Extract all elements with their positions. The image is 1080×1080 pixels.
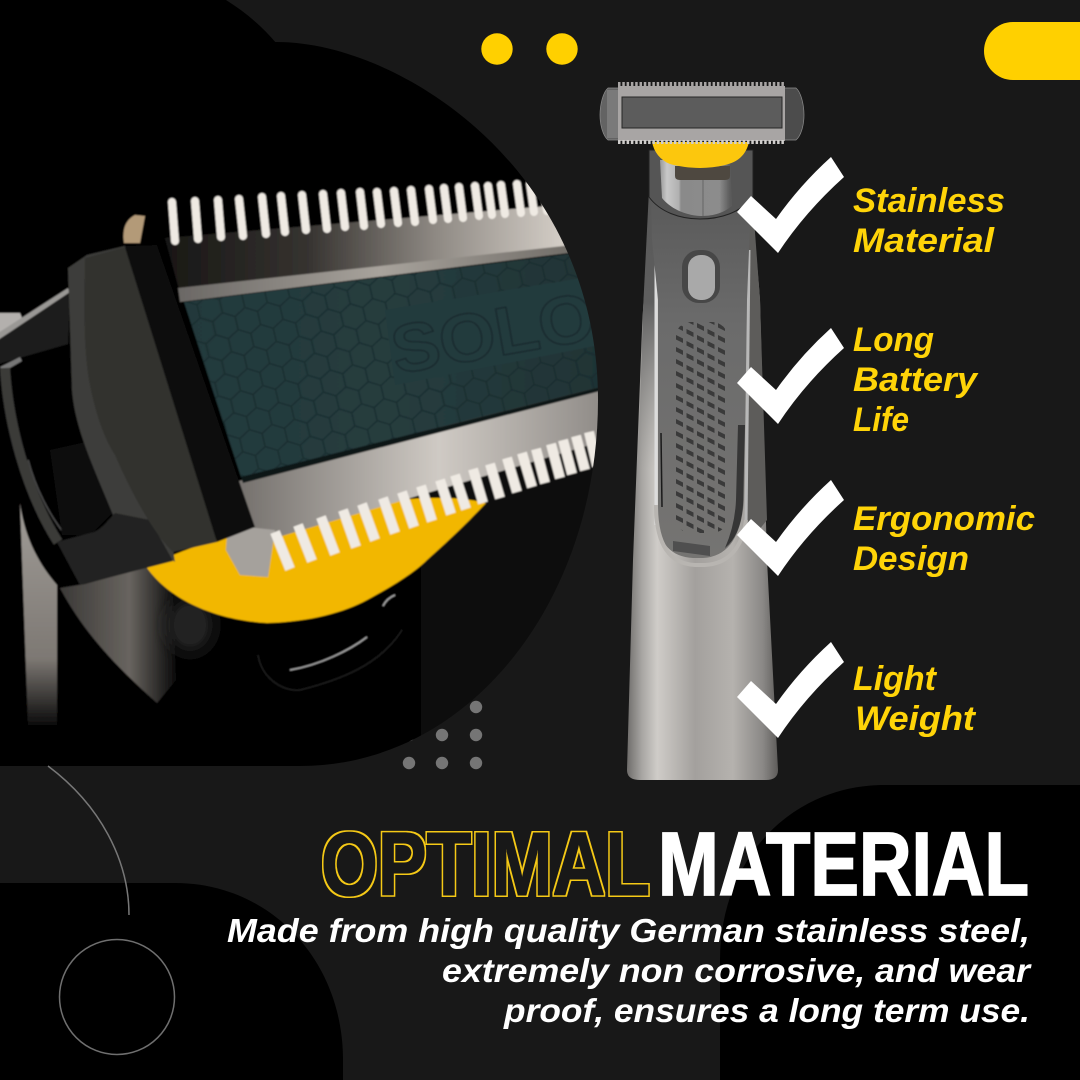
right side strip (747, 205, 767, 545)
feature: long battery life (853, 321, 979, 439)
bracket dark arm (0, 292, 70, 365)
description: extremely non corrosive, and wear (442, 952, 1032, 989)
end cap black band (125, 245, 255, 542)
yellow guard (147, 498, 486, 623)
decorative circle (60, 940, 174, 1054)
yellow dot right (546, 33, 578, 65)
lens shadow (50, 440, 115, 535)
description (227, 912, 1032, 1029)
lower blade notch (226, 525, 275, 577)
handle panel (651, 200, 751, 558)
panel shadow right (725, 425, 745, 548)
title: OPTIMAL (321, 815, 650, 915)
power button (688, 255, 715, 300)
photo: blade close-up (0, 30, 611, 780)
shape: bottom-left black block (0, 883, 343, 1080)
neck (649, 150, 753, 219)
check mark 3 (737, 480, 844, 576)
panel lower slot (673, 541, 710, 556)
grip texture (675, 322, 728, 533)
decorative arc line (48, 766, 129, 915)
handle dark highlight (166, 597, 214, 653)
upper blade body (165, 205, 582, 293)
copper tab (123, 215, 145, 243)
check mark 1 (737, 157, 844, 253)
bracket white patch (0, 312, 23, 333)
feature: long battery life: Long (853, 321, 934, 359)
yellow dot left (481, 33, 513, 65)
product: trimmer (600, 84, 804, 780)
description: Made from high quality German stainless steel, (227, 912, 1030, 949)
feature: ergonomic design: Design (853, 540, 969, 578)
feature: long battery life: Battery (853, 361, 979, 399)
description: proof, ensures a long term use. (503, 992, 1030, 1029)
green panel with hexagon texture (184, 250, 600, 483)
handle switch outlines (258, 630, 402, 690)
dark backdrop right (421, 432, 593, 735)
bracket tab (0, 357, 22, 372)
power button rim (682, 250, 720, 303)
title (321, 815, 1029, 915)
head top teeth (618, 82, 785, 87)
check mark 4 (737, 642, 844, 738)
feature: ergonomic design (853, 500, 1035, 578)
feature: stainless material: Stainless (853, 182, 1005, 220)
upper blade teeth (172, 183, 547, 241)
head left cap (600, 88, 622, 140)
head bottom teeth (618, 140, 785, 144)
shape: bottom-right black block (720, 785, 1080, 1080)
lower blade teeth (275, 432, 597, 569)
bracket hook (57, 513, 173, 585)
trimmer handle silhouette (627, 190, 778, 780)
head right cap (782, 88, 804, 140)
collar slot (675, 166, 730, 180)
feature: light weight: Weight (855, 700, 977, 738)
bracket inner highlight (28, 460, 63, 532)
head center panel (622, 97, 782, 128)
feature: stainless material (853, 182, 1005, 260)
collar seam (702, 180, 704, 216)
decorative dot grid (403, 701, 482, 769)
bracket outer curved arm (5, 368, 58, 542)
handle silver column (20, 503, 57, 725)
handle swoosh surface (60, 560, 176, 703)
yellow guard (652, 142, 749, 168)
panel shadow left (661, 433, 662, 507)
embossed SOLO lettering: SOLO (385, 278, 600, 389)
feature: long battery life: Life (853, 401, 909, 439)
head left cap highlight (607, 90, 622, 138)
feature: ergonomic design: Ergonomic (853, 500, 1035, 538)
end cap panel (84, 247, 217, 552)
cap outer rim (68, 246, 175, 562)
feature: stainless material: Material (853, 222, 996, 260)
head blade bar (618, 86, 785, 141)
shape: top-left black corner (0, 0, 277, 60)
yellow pill top right (984, 22, 1080, 80)
bracket arm highlight (0, 288, 70, 342)
collar (660, 160, 732, 216)
handle switch glint (290, 595, 395, 670)
check mark 2 (737, 328, 844, 424)
right bright line (746, 250, 749, 525)
feature: light weight (853, 660, 977, 738)
panel rim (656, 505, 746, 565)
lower blade body (235, 384, 600, 545)
left side strip (638, 190, 658, 470)
left bright line (654, 245, 658, 525)
silver strip (178, 244, 584, 302)
feature: light weight: Light (853, 660, 938, 698)
